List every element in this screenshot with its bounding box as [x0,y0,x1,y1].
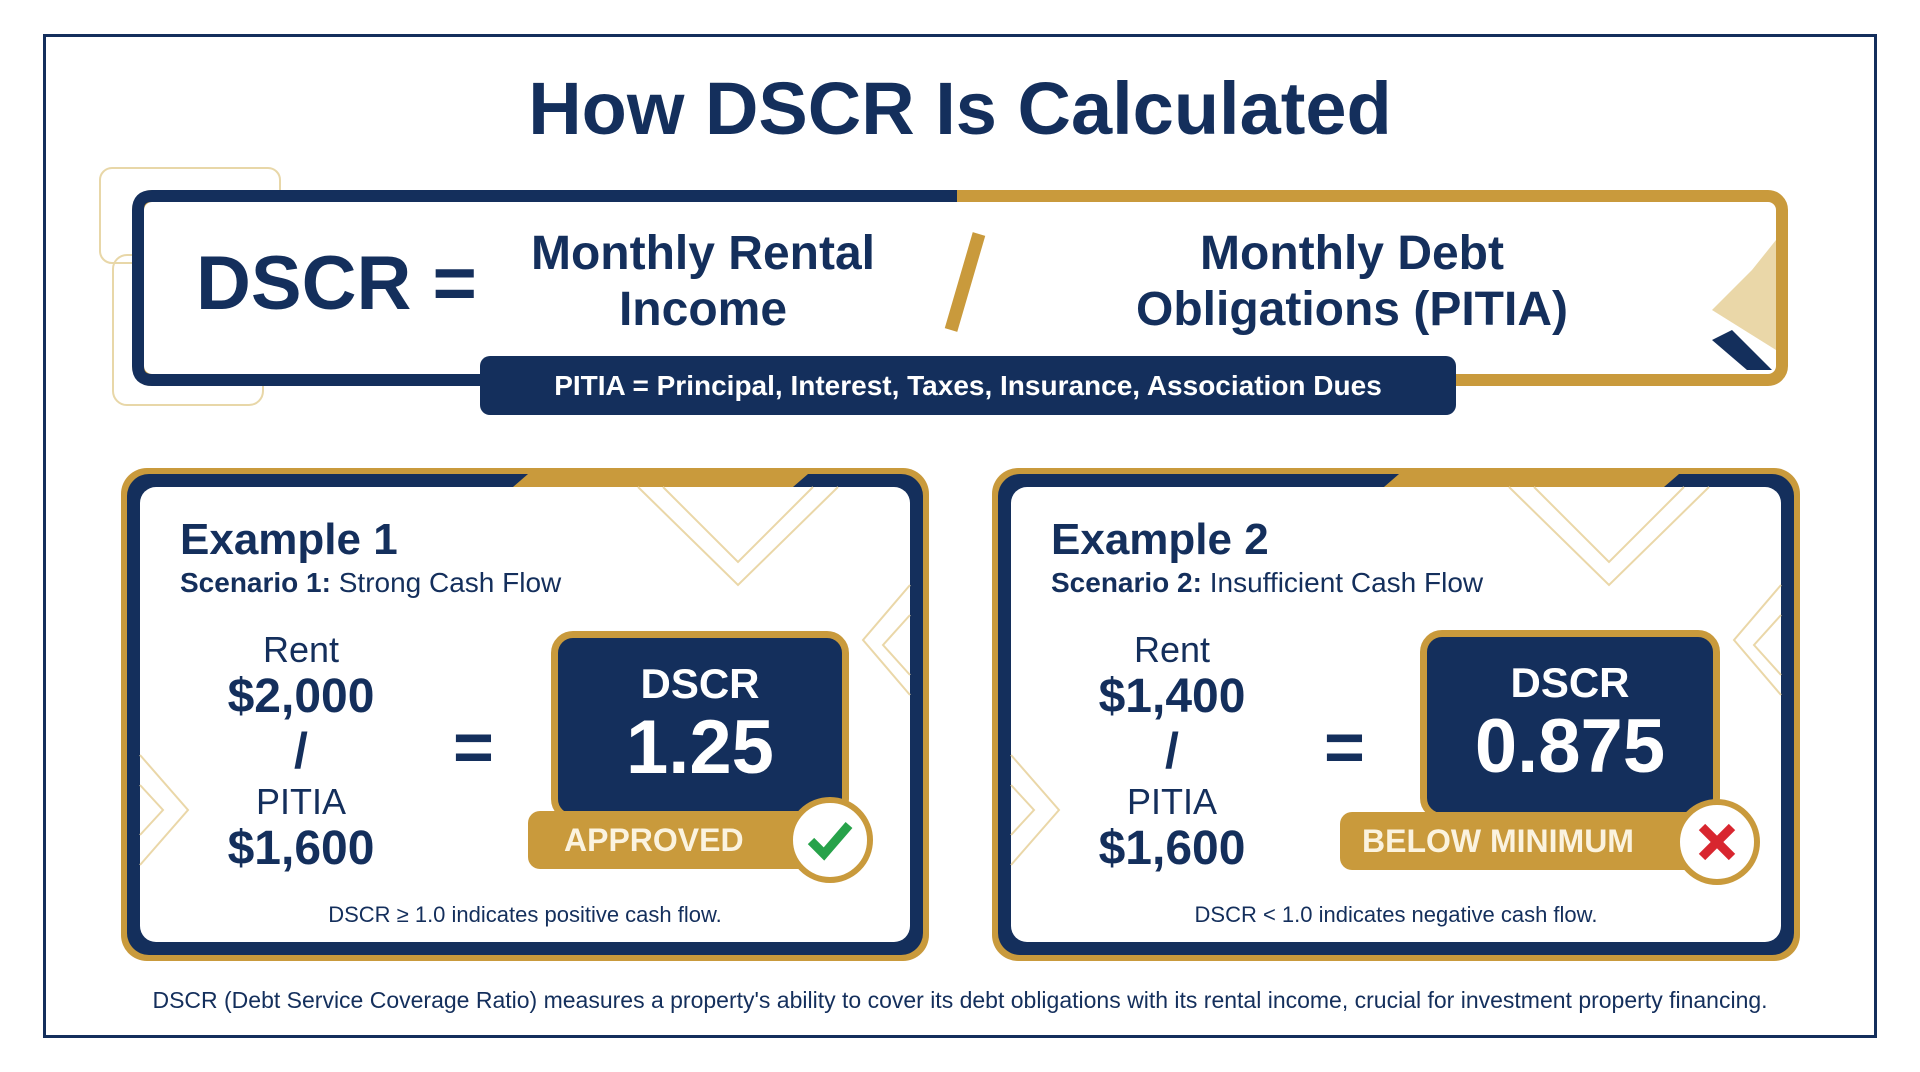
equals: = [1324,708,1365,786]
rent calc: $2,000 [228,670,374,723]
footer caption: DSCR (Debt Service Coverage Ratio) measures a property's ability to cover its debt obligations with its rental income, crucial for investment property financing. [152,987,1768,1013]
rent calc [1099,629,1245,875]
panel: example 2 [992,468,1800,961]
rent calc: PITIA [1127,781,1217,822]
result box: DSCR [1510,659,1630,706]
result box: 0.875 [1475,704,1665,789]
decorative gold outlines left [99,167,281,406]
note: DSCR ≥ 1.0 indicates positive cash flow. [328,902,722,927]
below minimum bar: BELOW MINIMUM [1362,823,1634,859]
scenario: Scenario 1: Strong Cash Flow [180,567,561,598]
denominator [1136,227,1568,336]
rent calc: $1,600 [228,822,374,875]
panel: example 1 [121,468,929,961]
approved bar: APPROVED [564,822,744,858]
numerator: Income [619,283,787,336]
rent calc [228,629,374,875]
title: How DSCR Is Calculated [528,67,1392,150]
PITIA pill [480,356,1456,415]
result box [1420,630,1720,820]
icon: x [1674,799,1760,885]
denominator: Monthly Debt [1200,227,1504,280]
approved bar [528,811,838,869]
numerator: Monthly Rental [531,227,875,280]
note: DSCR < 1.0 indicates negative cash flow. [1195,902,1597,927]
DSCR =: DSCR = [196,241,477,326]
scenario: Scenario 2: Insufficient Cash Flow [1051,567,1483,598]
result box: DSCR [640,660,760,707]
rent calc: $1,400 [1099,670,1245,723]
equals: = [453,708,494,786]
slash [944,232,986,332]
rent calc: PITIA [256,781,346,822]
rent calc: $1,600 [1099,822,1245,875]
heading: Example 2 [1051,515,1269,564]
result box [551,631,849,821]
formula box [132,190,1788,386]
rent calc: Rent [1134,629,1210,670]
icon: check [787,797,873,883]
rent calc: / [1165,723,1179,779]
rent calc: / [294,723,308,779]
heading: Example 1 [180,515,398,564]
PITIA pill: PITIA = Principal, Interest, Taxes, Insurance, Association Dues [554,370,1382,401]
result box: 1.25 [626,705,774,790]
numerator [531,227,875,336]
below minimum bar [1340,812,1710,870]
rent calc: Rent [263,629,339,670]
denominator: Obligations (PITIA) [1136,283,1568,336]
